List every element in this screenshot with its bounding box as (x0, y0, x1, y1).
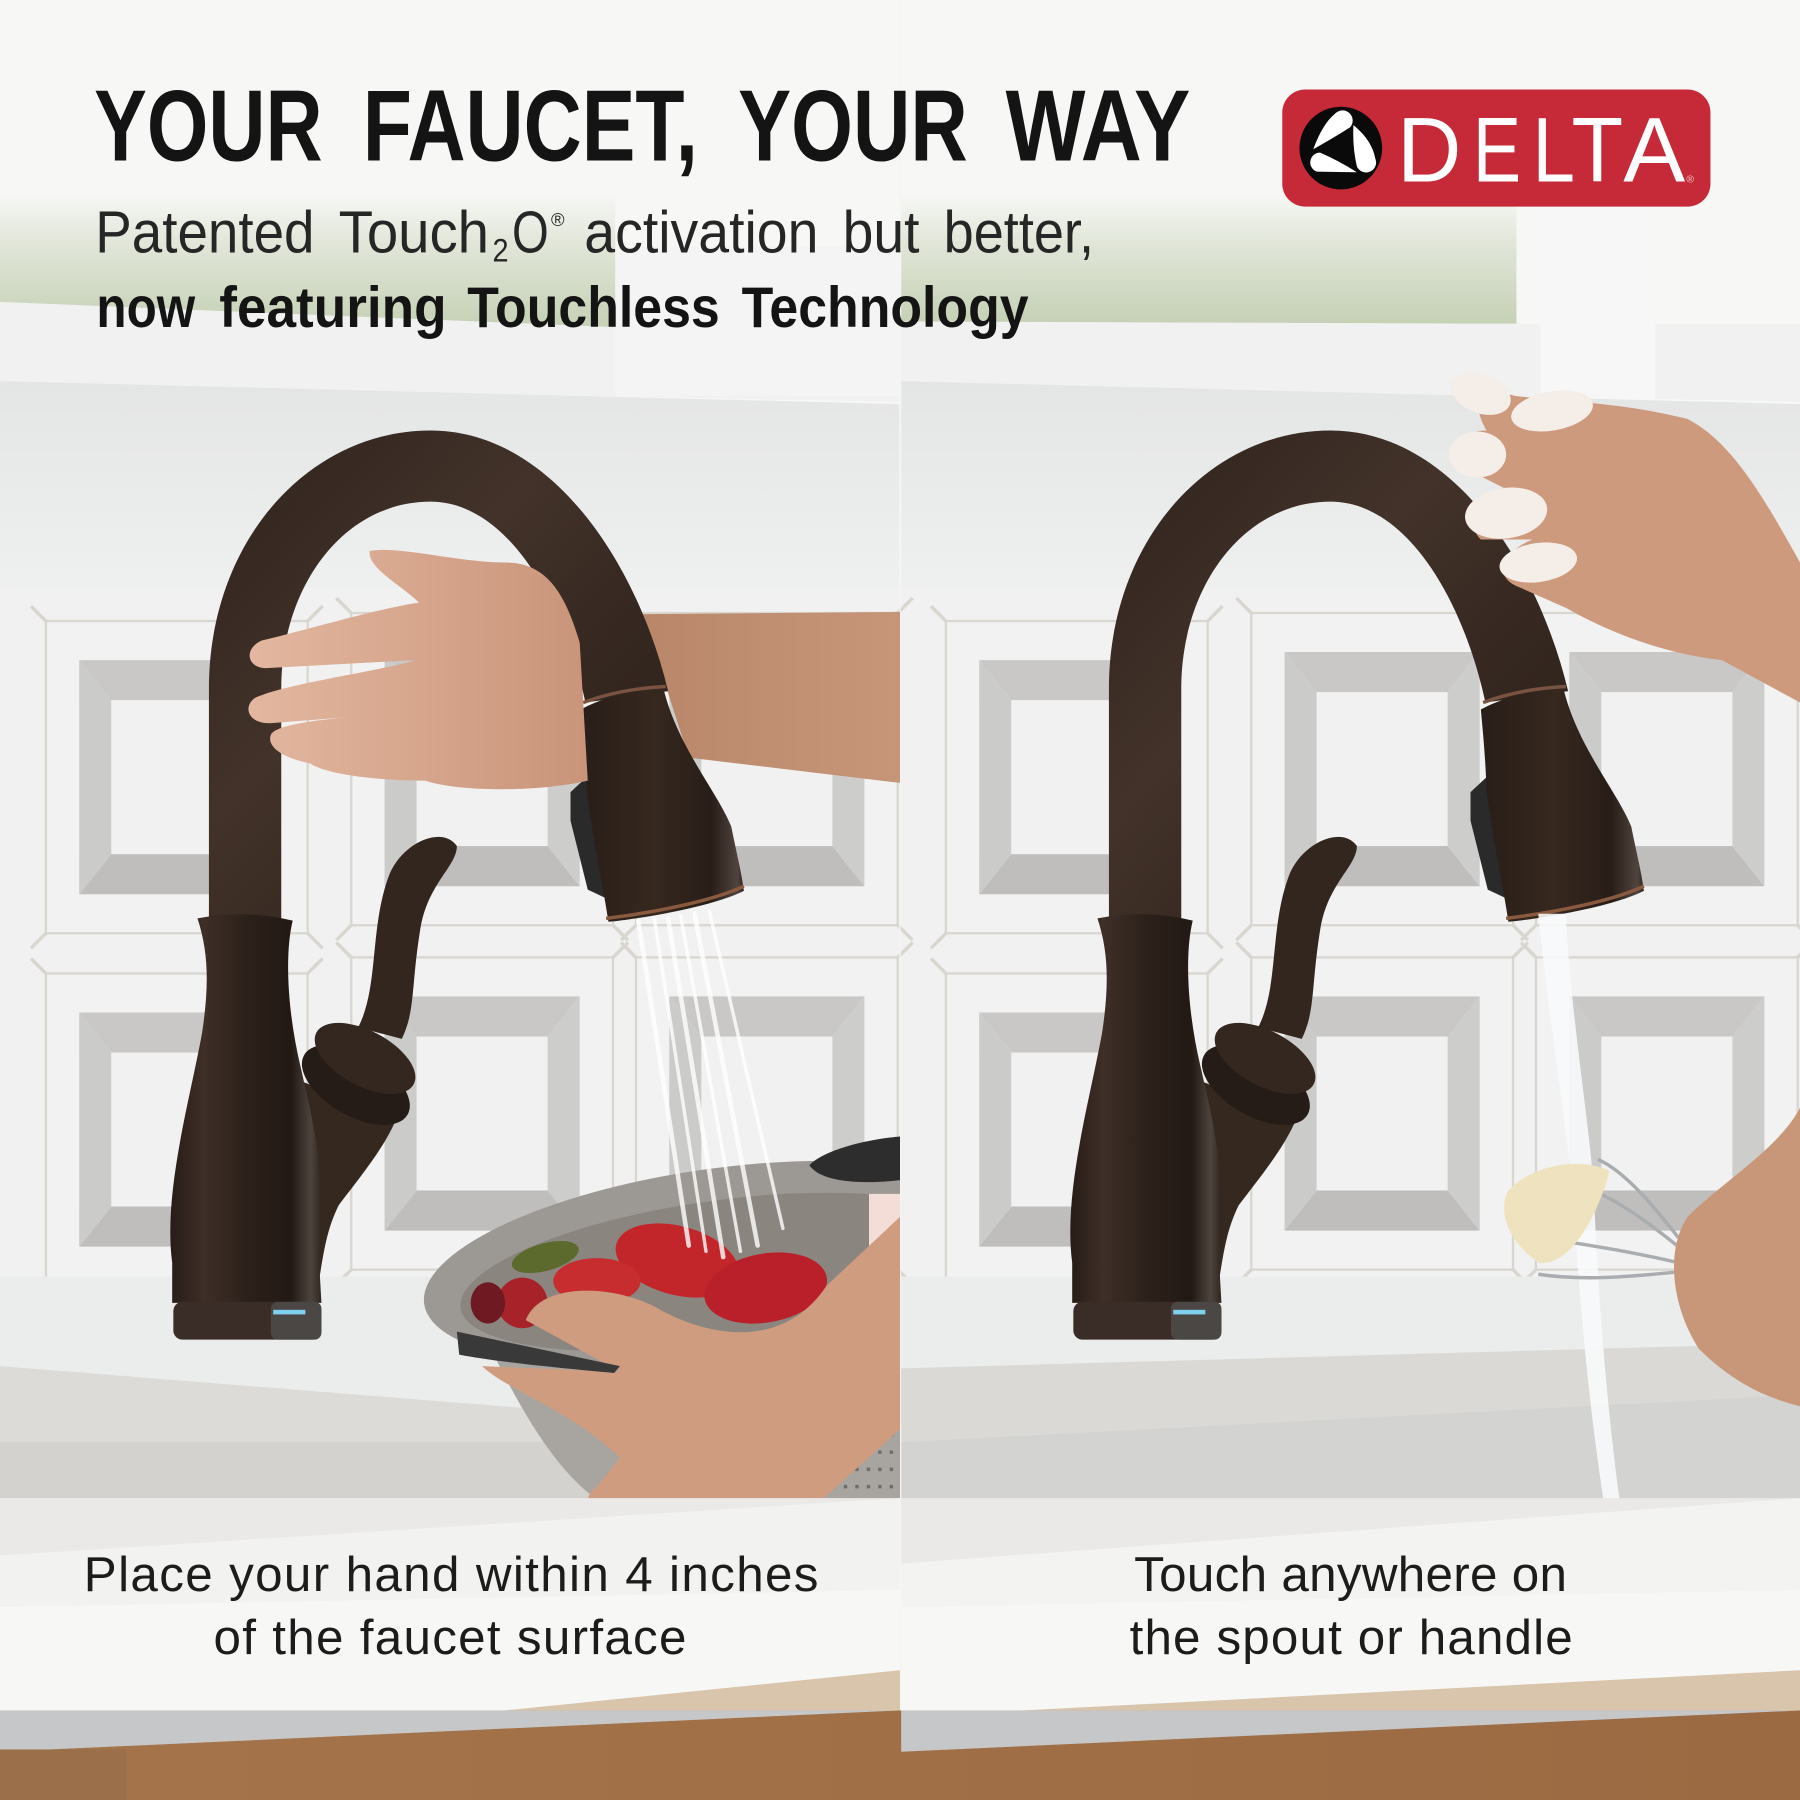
caption left (84, 1547, 818, 1665)
window view right (901, 195, 1516, 324)
subtitle line two: Touchless (467, 276, 720, 340)
title: YOUR (94, 71, 323, 183)
subtitle line one: but (843, 199, 920, 266)
logo wordmark: A (1623, 99, 1686, 201)
colander perforations (834, 1436, 894, 1488)
caption right: Touch anywhere on (1134, 1547, 1567, 1602)
window frame right (1541, 207, 1655, 402)
subtitle line one: O (512, 199, 549, 266)
logo: Delta (1282, 90, 1710, 207)
counter edge left (0, 1366, 900, 1446)
subtitle line one: better, (944, 199, 1094, 266)
logo wordmark: E (1473, 99, 1521, 201)
faucet: left panel (170, 430, 744, 1340)
counter top (0, 1277, 1800, 1426)
title: YOUR (738, 71, 968, 183)
logo wordmark: L (1533, 99, 1575, 201)
icon: Delta triangle mark (1299, 107, 1382, 189)
caption right (1130, 1547, 1573, 1665)
wall left (0, 381, 900, 597)
hand holding whisk (1674, 1108, 1800, 1406)
subtitle line one: Touch (339, 199, 489, 266)
colander with strawberries (424, 1136, 900, 1498)
window sill left (0, 302, 900, 402)
logo wordmark (1397, 99, 1686, 201)
hand near faucet (248, 550, 588, 789)
caption left: Place your hand within 4 inches (84, 1547, 818, 1602)
title (94, 71, 1190, 183)
registered mark: ® (1686, 175, 1694, 186)
colander top handle (809, 1136, 900, 1182)
cabinet front (0, 1442, 900, 1511)
subtitle line one: Patented (95, 199, 315, 266)
wood floor strip (0, 1710, 1800, 1800)
subtitle line one: activation (584, 199, 818, 266)
counter edge right (901, 1343, 1800, 1442)
subtitle line two: featuring (219, 276, 447, 340)
window sill right (901, 321, 1800, 402)
water spray (638, 911, 783, 1257)
logo wordmark: D (1397, 99, 1461, 201)
cream blobs (1445, 365, 1596, 587)
subtitle line two (96, 276, 1029, 340)
subtitle line one (95, 199, 1094, 269)
faucet: right panel (1070, 430, 1644, 1340)
title: WAY (1006, 71, 1190, 183)
water stream (1538, 914, 1621, 1510)
window frame centre (615, 247, 900, 396)
whisk with batter (1504, 1159, 1678, 1278)
subtitle line two: now (96, 276, 195, 340)
caption band right (901, 1498, 1800, 1710)
strawberries (470, 1223, 827, 1328)
subtitle line one: ® (551, 209, 565, 230)
wall right (901, 381, 1800, 597)
caption right: the spout or handle (1130, 1610, 1573, 1665)
hand with cream fingers (1445, 365, 1800, 703)
caption left: of the faucet surface (214, 1610, 686, 1665)
subtitle line one: 2 (492, 233, 509, 269)
subtitle line two: Technology (742, 276, 1029, 340)
hand holding colander (457, 1194, 900, 1518)
tile backsplash (0, 588, 1800, 1301)
logo wordmark: T (1572, 99, 1623, 201)
caption band left (0, 1498, 900, 1710)
arm: left panel (643, 612, 900, 783)
window view left (0, 195, 615, 327)
title: FAUCET, (363, 71, 698, 183)
